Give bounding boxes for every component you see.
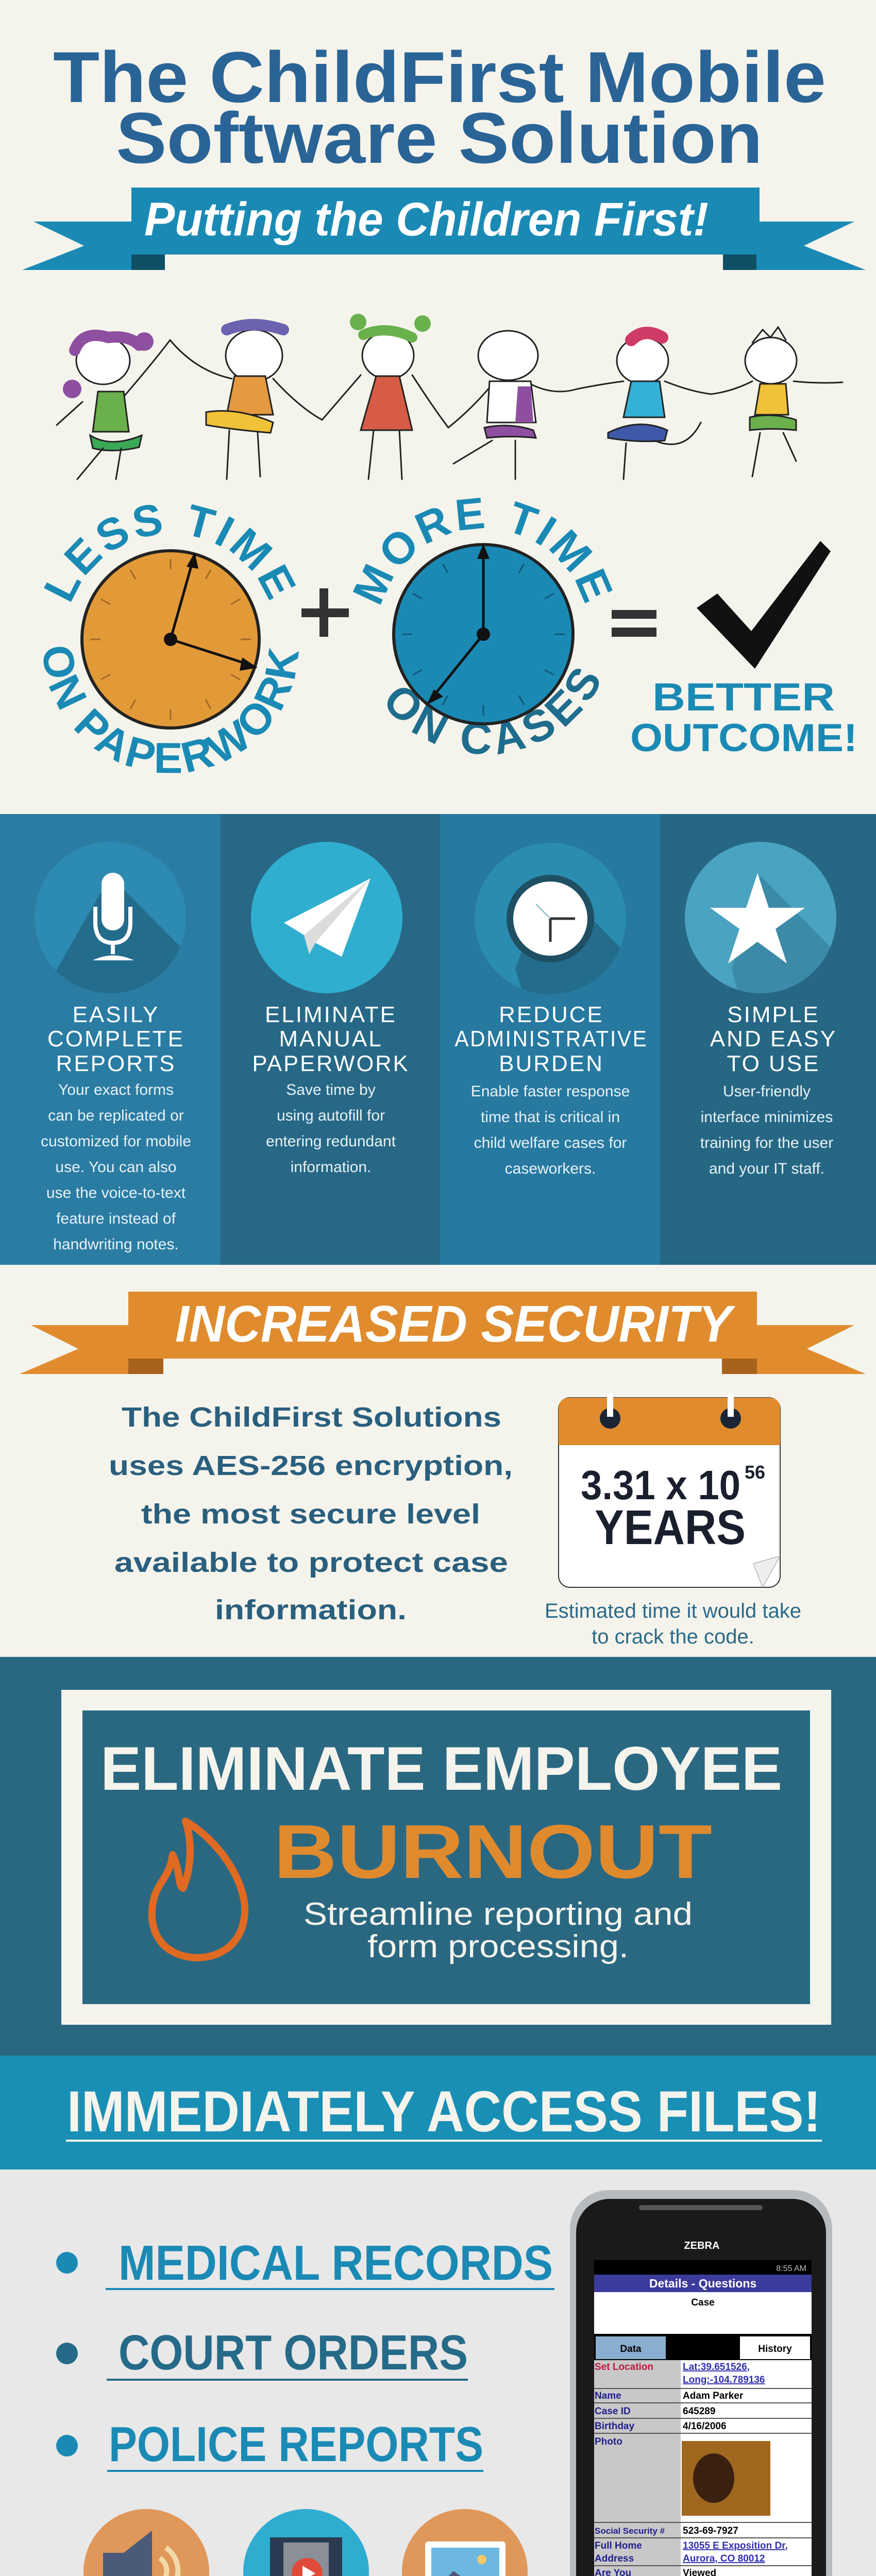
list: file types: MEDICAL RECORDS — [119, 2235, 553, 2291]
clock: more time on cases — [352, 498, 613, 755]
text: encryption statement: information. — [215, 1595, 407, 1625]
clock: less time on paperwork: LESS TIME — [44, 504, 296, 602]
screen content: Case ID — [595, 2406, 631, 2417]
screen content: 645289 — [683, 2406, 715, 2417]
title: Software Solution — [116, 97, 763, 178]
caption: estimated time: Estimated time it would take — [545, 1600, 801, 1622]
ribbon: increased security — [20, 1292, 866, 1374]
feature 1: easily complete reports: can be replicated or — [48, 1107, 184, 1124]
feature 4: simple and easy to use: training for the user — [700, 1134, 833, 1151]
screen content: 4/16/2006 — [683, 2421, 727, 2432]
screen content: Case — [691, 2297, 715, 2308]
title — [53, 37, 826, 178]
feature 1: easily complete reports: feature instead of — [56, 1210, 176, 1227]
feature 1: easily complete reports: EASILY — [73, 1002, 159, 1027]
feature 4: simple and easy to use: SIMPLE — [727, 1002, 820, 1027]
feature 2: eliminate manual paperwork: ELIMINATE — [265, 1002, 397, 1027]
ribbon: increased security: INCREASED SECURITY — [175, 1295, 736, 1353]
phone mockup — [570, 2190, 832, 2576]
feature 1: easily complete reports: use the voice-to-text — [46, 1184, 186, 1201]
feature 3: reduce administrative burden: caseworkers. — [505, 1160, 596, 1177]
ribbon: Putting the Children First — [22, 188, 866, 270]
screen content: Address — [595, 2553, 634, 2564]
icon: paper plane — [251, 842, 402, 993]
panel: features — [0, 814, 876, 1265]
screen content: History — [758, 2344, 792, 2354]
screen content: Full Home — [595, 2540, 642, 2551]
text: encryption statement: uses AES-256 encryption, — [109, 1450, 513, 1481]
screen content: Set Location — [595, 2362, 653, 2372]
feature 3: reduce administrative burden: ADMINISTRATIVE — [454, 1026, 648, 1052]
feature 4: simple and easy to use: User-friendly — [723, 1083, 811, 1100]
equals sign — [612, 610, 656, 637]
icon: flame — [152, 1821, 245, 1958]
feature 3: reduce administrative burden: Enable faster response — [471, 1083, 630, 1100]
panel: eliminate employee burnout: BURNOUT — [274, 1809, 712, 1894]
icon: photos — [395, 2509, 543, 2576]
feature 3: reduce administrative burden: child welfare cases for — [474, 1134, 627, 1151]
feature 1: easily complete reports: use. You can also — [55, 1159, 177, 1176]
screen content: Lat:39.651526, — [683, 2362, 750, 2372]
feature 2: eliminate manual paperwork: Save time by — [286, 1081, 376, 1098]
list: file types: POLICE REPORTS — [109, 2417, 483, 2472]
caption: estimated time: to crack the code. — [592, 1625, 754, 1648]
icon: microphone — [35, 842, 186, 993]
feature 3: reduce administrative burden: BURDEN — [499, 1051, 604, 1076]
clock: less time on paperwork — [43, 504, 299, 773]
text: encryption statement: available to protect case — [114, 1547, 508, 1578]
feature 1: easily complete reports — [35, 842, 191, 1252]
calendar: 3.31 x 10^56 years: 56 — [745, 1462, 765, 1483]
screen content: Data — [620, 2344, 642, 2354]
feature 1: easily complete reports: REPORTS — [56, 1051, 176, 1076]
ribbon: Putting the Children First: Putting the Children First! — [144, 193, 709, 246]
panel: eliminate employee burnout: form processing. — [367, 1929, 629, 1964]
screen content: Adam Parker — [683, 2391, 744, 2401]
illustration: children holding hands — [57, 314, 843, 479]
text: better outcome: BETTER — [652, 675, 835, 719]
phone mockup: 8:55 AM — [776, 2264, 806, 2273]
clock: more time on cases: MORE TIME — [352, 498, 613, 605]
screen content: Name — [595, 2391, 621, 2401]
feature 4: simple and easy to use: and your IT staff. — [709, 1160, 824, 1177]
feature 4: simple and easy to use: interface minimizes — [701, 1109, 833, 1126]
caption: estimated time — [545, 1600, 801, 1648]
screen content: Long:-104.789136 — [683, 2375, 765, 2385]
panel: eliminate employee burnout — [61, 1690, 831, 2025]
text: encryption statement — [109, 1402, 513, 1625]
panel: eliminate employee burnout: ELIMINATE EMPLOYEE — [100, 1734, 782, 1803]
feature 1: easily complete reports: COMPLETE — [47, 1026, 184, 1052]
screen content: Photo — [595, 2436, 622, 2447]
feature 3: reduce administrative burden — [454, 843, 646, 1174]
feature 1: easily complete reports: customized for mobile — [41, 1133, 191, 1150]
feature 2: eliminate manual paperwork: entering redundant — [266, 1133, 396, 1150]
clock: more time on cases: ON CASES — [388, 669, 599, 755]
calendar: 3.31 x 10^56 years — [559, 1394, 780, 1587]
feature 2: eliminate manual paperwork: MANUAL — [279, 1026, 383, 1052]
calendar: 3.31 x 10^56 years: YEARS — [595, 1500, 746, 1555]
feature 1: easily complete reports: handwriting notes. — [53, 1236, 179, 1253]
feature 4: simple and easy to use: TO USE — [727, 1051, 820, 1076]
screen content — [594, 2275, 812, 2576]
screen content: Aurora, CO 80012 — [683, 2553, 765, 2564]
list: file types: COURT ORDERS — [119, 2325, 468, 2380]
icon: checkmark — [697, 541, 831, 669]
feature 3: reduce administrative burden: REDUCE — [499, 1002, 604, 1027]
screen content: 523-69-7927 — [683, 2526, 738, 2536]
feature 4: simple and easy to use — [685, 842, 836, 1177]
screen content: Social Security # — [595, 2526, 665, 2536]
icon: video — [243, 2509, 369, 2576]
feature 2: eliminate manual paperwork: PAPERWORK — [252, 1051, 409, 1076]
text: encryption statement: the most secure level — [141, 1499, 480, 1530]
screen content: 13055 E Exposition Dr, — [683, 2540, 788, 2551]
screen content: Birthday — [595, 2421, 635, 2432]
panel: eliminate employee burnout: Streamline reporting and — [304, 1896, 693, 1932]
clock: less time on paperwork: ON PAPERWORK — [43, 647, 299, 773]
feature 1: easily complete reports: Your exact forms — [58, 1081, 174, 1098]
icon: star — [685, 842, 836, 993]
icon: clock — [475, 843, 626, 994]
title: The ChildFirst Mobile — [53, 37, 826, 117]
screen content: Details - Questions — [649, 2277, 756, 2290]
text: better outcome — [630, 675, 857, 760]
feature 2: eliminate manual paperwork: using autofill for — [277, 1107, 385, 1124]
feature 2: eliminate manual paperwork: information. — [291, 1159, 371, 1176]
icon: audio — [83, 2509, 209, 2576]
text: encryption statement: The ChildFirst Solutions — [122, 1402, 501, 1433]
calendar: 3.31 x 10^56 years: 3.31 x 10 — [581, 1462, 740, 1508]
feature 4: simple and easy to use: AND EASY — [710, 1026, 837, 1052]
feature 3: reduce administrative burden: time that is critical in — [481, 1109, 620, 1126]
phone mockup: ZEBRA — [684, 2240, 719, 2251]
feature 2: eliminate manual paperwork — [251, 842, 409, 1176]
list: file types — [56, 2235, 554, 2472]
plus sign — [301, 588, 349, 637]
text: better outcome: OUTCOME! — [630, 716, 857, 760]
